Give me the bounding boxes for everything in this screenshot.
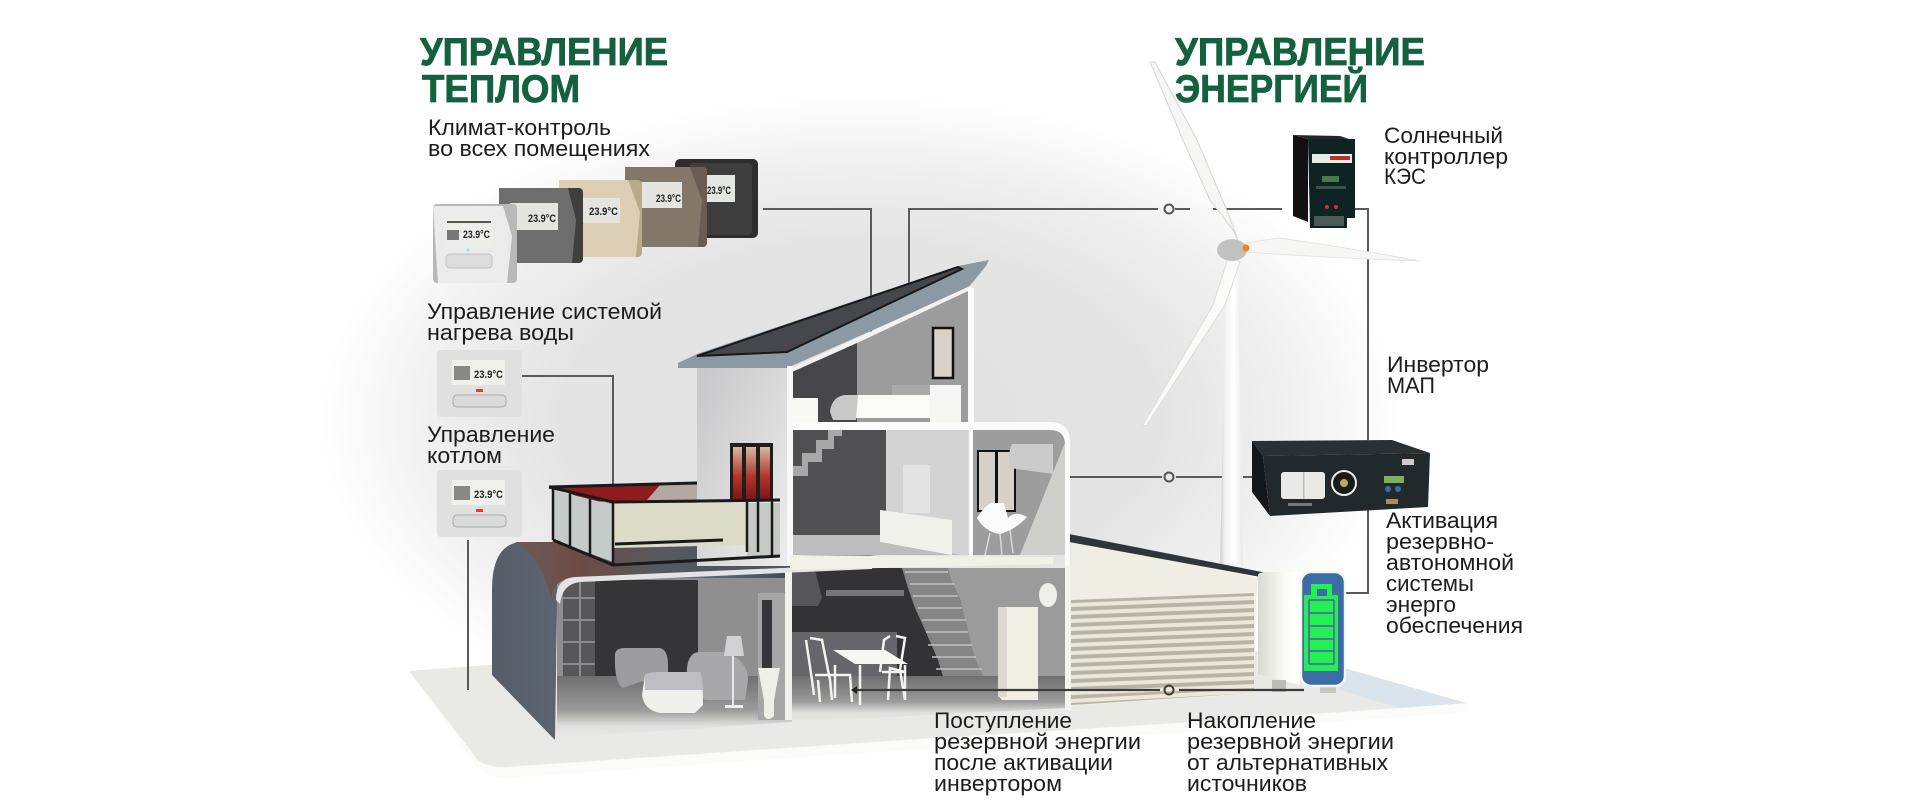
base plate [409, 620, 1466, 778]
label: climate control [428, 115, 650, 161]
balcony [549, 483, 780, 566]
label: reserve energy storage: источников [1187, 771, 1307, 796]
label: reserve energy storage: от альтернативных [1187, 750, 1388, 775]
label: backup system activation [1386, 508, 1523, 638]
garage [1069, 534, 1272, 706]
thermostat: brown: 23.9°C [656, 193, 681, 205]
heading: heat management: ТЕПЛОМ [422, 68, 580, 111]
label: reserve energy input: резервной энергии [934, 729, 1141, 754]
second floor right room [972, 430, 1066, 555]
label: backup system activation: энерго [1386, 592, 1456, 617]
thermostat: grey [499, 188, 583, 263]
inverter [1252, 440, 1430, 516]
white house frame [790, 422, 1070, 565]
back wall [595, 580, 698, 678]
thermostat: black [675, 159, 758, 238]
label: boiler: Управление [427, 422, 555, 447]
stairs [902, 568, 987, 683]
label: backup system activation: резервно- [1386, 529, 1494, 554]
roof deck [515, 542, 880, 605]
garage wall edge [1065, 565, 1071, 710]
turbine tower [1220, 270, 1243, 570]
climate control thermostats [433, 159, 758, 283]
living room [557, 570, 792, 738]
heading: heat management [420, 31, 668, 111]
dining table [833, 650, 908, 664]
label: reserve energy storage: резервной энергии [1187, 729, 1394, 754]
boiler controller [437, 470, 522, 537]
label: reserve energy input: инвертором [934, 771, 1062, 796]
heading: energy management: УПРАВЛЕНИЕ [1175, 31, 1425, 74]
thermostat: white [433, 204, 517, 283]
bottom wire [851, 686, 1304, 694]
roof [678, 260, 989, 374]
label: boiler: котлом [427, 443, 502, 468]
inverter fan [1332, 471, 1356, 495]
label: backup system activation: обеспечения [1386, 613, 1523, 638]
label: climate control: Климат-контроль [428, 115, 611, 140]
kitchen counter [792, 632, 897, 680]
solar controller [1293, 135, 1355, 228]
kitchen floor [792, 676, 1066, 722]
bed [792, 385, 930, 422]
label: water heating: Управление системой [427, 299, 662, 324]
thermostat: white: 23.9°C [463, 229, 490, 241]
roof frame [678, 260, 989, 368]
bookshelf [563, 580, 595, 680]
wind turbine [1143, 62, 1420, 570]
kitchen back wall [792, 568, 945, 683]
room window [978, 451, 1015, 511]
door [758, 593, 785, 720]
label: solar controller: КЭС [1384, 164, 1426, 189]
heading: energy management [1175, 31, 1425, 111]
attic window [933, 328, 953, 378]
label: solar controller: Солнечный [1384, 123, 1503, 148]
water heater [1039, 583, 1057, 607]
heading: heat management: УПРАВЛЕНИЕ [420, 31, 668, 74]
interior stairs [792, 430, 842, 476]
inverter display [1384, 476, 1404, 483]
TV stand [880, 510, 952, 555]
label: climate control: во всех помещениях [428, 136, 650, 161]
floor lamp [724, 636, 744, 708]
thermostat: grey: 23.9°C [528, 213, 556, 225]
second floor left room [792, 430, 886, 536]
turbine hub [1217, 239, 1250, 261]
label: water heating [427, 299, 662, 345]
label: solar controller: контроллер [1384, 144, 1508, 169]
floor slab [790, 555, 1053, 570]
label: reserve energy input: Поступление [934, 708, 1072, 733]
label: inverter: МАП [1387, 373, 1435, 398]
thermostat: beige: 23.9°C [589, 206, 618, 218]
second floor room floor [792, 535, 960, 555]
heading: energy management: ЭНЕРГИЕЙ [1175, 66, 1368, 111]
battery [1258, 572, 1345, 693]
water heating controller: 23.9°C [474, 369, 503, 381]
ground floor left wing shell [492, 542, 800, 740]
label: inverter: Инвертор [1387, 352, 1489, 377]
boiler [998, 607, 1038, 700]
house [492, 260, 1272, 740]
garage shutter [1071, 593, 1254, 705]
solar panel [697, 267, 962, 356]
thermostat: brown [625, 167, 707, 247]
label: reserve energy input: после активации [934, 750, 1113, 775]
label: backup system activation: Активация [1386, 508, 1498, 533]
vase [758, 668, 780, 719]
thermostat: beige [559, 180, 642, 257]
second floor [792, 430, 1066, 555]
column [785, 570, 792, 720]
air conditioner [1009, 444, 1053, 474]
turbine blades [1143, 62, 1420, 426]
dining set [806, 636, 905, 705]
balcony door [730, 443, 773, 501]
thermostat: black: 23.9°C [707, 185, 731, 197]
slab edge [556, 564, 872, 604]
label: backup system activation: системы [1386, 571, 1474, 596]
attic room [792, 291, 968, 422]
chair [977, 503, 1027, 555]
label: inverter [1387, 352, 1489, 398]
armchairs [615, 648, 748, 713]
water heating controller [437, 350, 522, 417]
TV [903, 465, 930, 513]
label: reserve energy storage: Накопление [1187, 708, 1316, 733]
label: reserve energy input [934, 708, 1141, 796]
label: boiler [427, 422, 555, 468]
upper volume exterior wall [697, 362, 789, 566]
wardrobe [930, 385, 961, 422]
kitchen hood and shelf [792, 570, 904, 606]
connector lines [468, 204, 1368, 690]
label: backup system activation: автономной [1386, 550, 1514, 575]
label: solar controller [1384, 123, 1508, 189]
label: water heating: нагрева воды [427, 320, 574, 345]
boiler controller: 23.9°C [474, 489, 503, 501]
inverter sockets [1281, 472, 1325, 499]
label: reserve energy storage [1187, 708, 1394, 796]
battery front panel [1301, 572, 1345, 686]
living room floor [557, 676, 792, 738]
battery charge icon [1304, 584, 1338, 671]
kitchen [792, 565, 1071, 722]
